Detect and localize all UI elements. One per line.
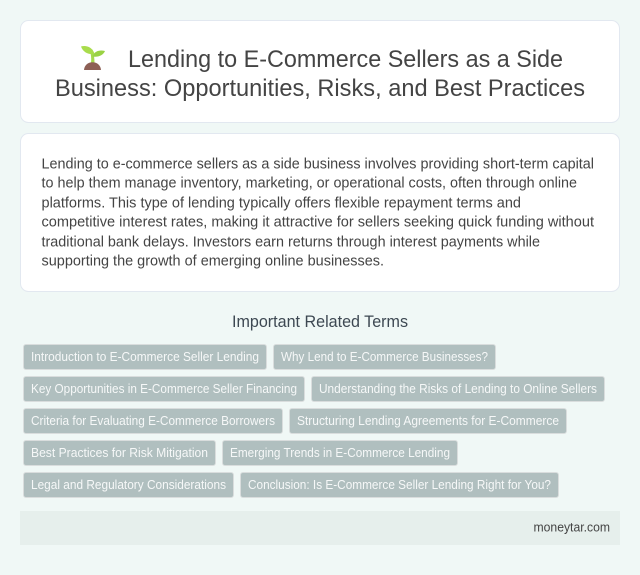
tag: Introduction to E-Commerce Seller Lending xyxy=(31,349,259,364)
tag xyxy=(240,472,558,498)
tag xyxy=(312,376,604,402)
footer xyxy=(20,511,620,545)
panel: summary xyxy=(20,134,620,292)
summary text: competitive interest rates, making it attractive for sellers seeking quick funding without xyxy=(42,214,595,231)
tag: Emerging Trends in E-Commerce Lending xyxy=(230,445,450,460)
tag xyxy=(24,376,304,402)
summary text: Lending to e-commerce sellers as a side business involves providing short-term capital xyxy=(42,155,594,172)
tag xyxy=(222,440,458,466)
tag: Legal and Regulatory Considerations xyxy=(31,477,226,492)
summary text: platforms. This type of lending typically offers flexible repayment terms and xyxy=(42,194,521,211)
tag: Understanding the Risks of Lending to Online Sellers xyxy=(319,381,597,396)
title xyxy=(55,46,585,102)
icon: sprout xyxy=(81,46,105,70)
panel: header xyxy=(20,20,620,122)
panel: related term tags xyxy=(24,344,604,498)
summary text: supporting the growth of emerging online businesses. xyxy=(42,253,384,270)
tag: Structuring Lending Agreements for E-Commerce xyxy=(297,413,559,428)
footer: moneytar.com xyxy=(534,520,610,535)
title: Lending to E-Commerce Sellers as a Side xyxy=(128,46,563,73)
tag xyxy=(24,344,266,370)
tag: Key Opportunities in E-Commerce Seller Financing xyxy=(31,381,297,396)
summary text: traditional bank delays. Investors earn returns through interest payments while xyxy=(42,233,540,250)
tag: Conclusion: Is E-Commerce Seller Lending Right for You? xyxy=(248,477,551,492)
title: Business: Opportunities, Risks, and Best Practices xyxy=(55,75,585,102)
tag xyxy=(24,408,282,434)
heading: related terms: Important Related Terms xyxy=(232,312,408,331)
tag xyxy=(274,344,496,370)
tag: Criteria for Evaluating E-Commerce Borrowers xyxy=(31,413,275,428)
tag: Best Practices for Risk Mitigation xyxy=(31,445,208,460)
tag: Why Lend to E-Commerce Businesses? xyxy=(281,349,488,364)
tag xyxy=(24,440,216,466)
tag xyxy=(290,408,566,434)
tag xyxy=(24,472,234,498)
summary text: to help them manage inventory, marketing, or operational costs, often through online xyxy=(42,175,577,192)
summary text xyxy=(42,155,595,270)
